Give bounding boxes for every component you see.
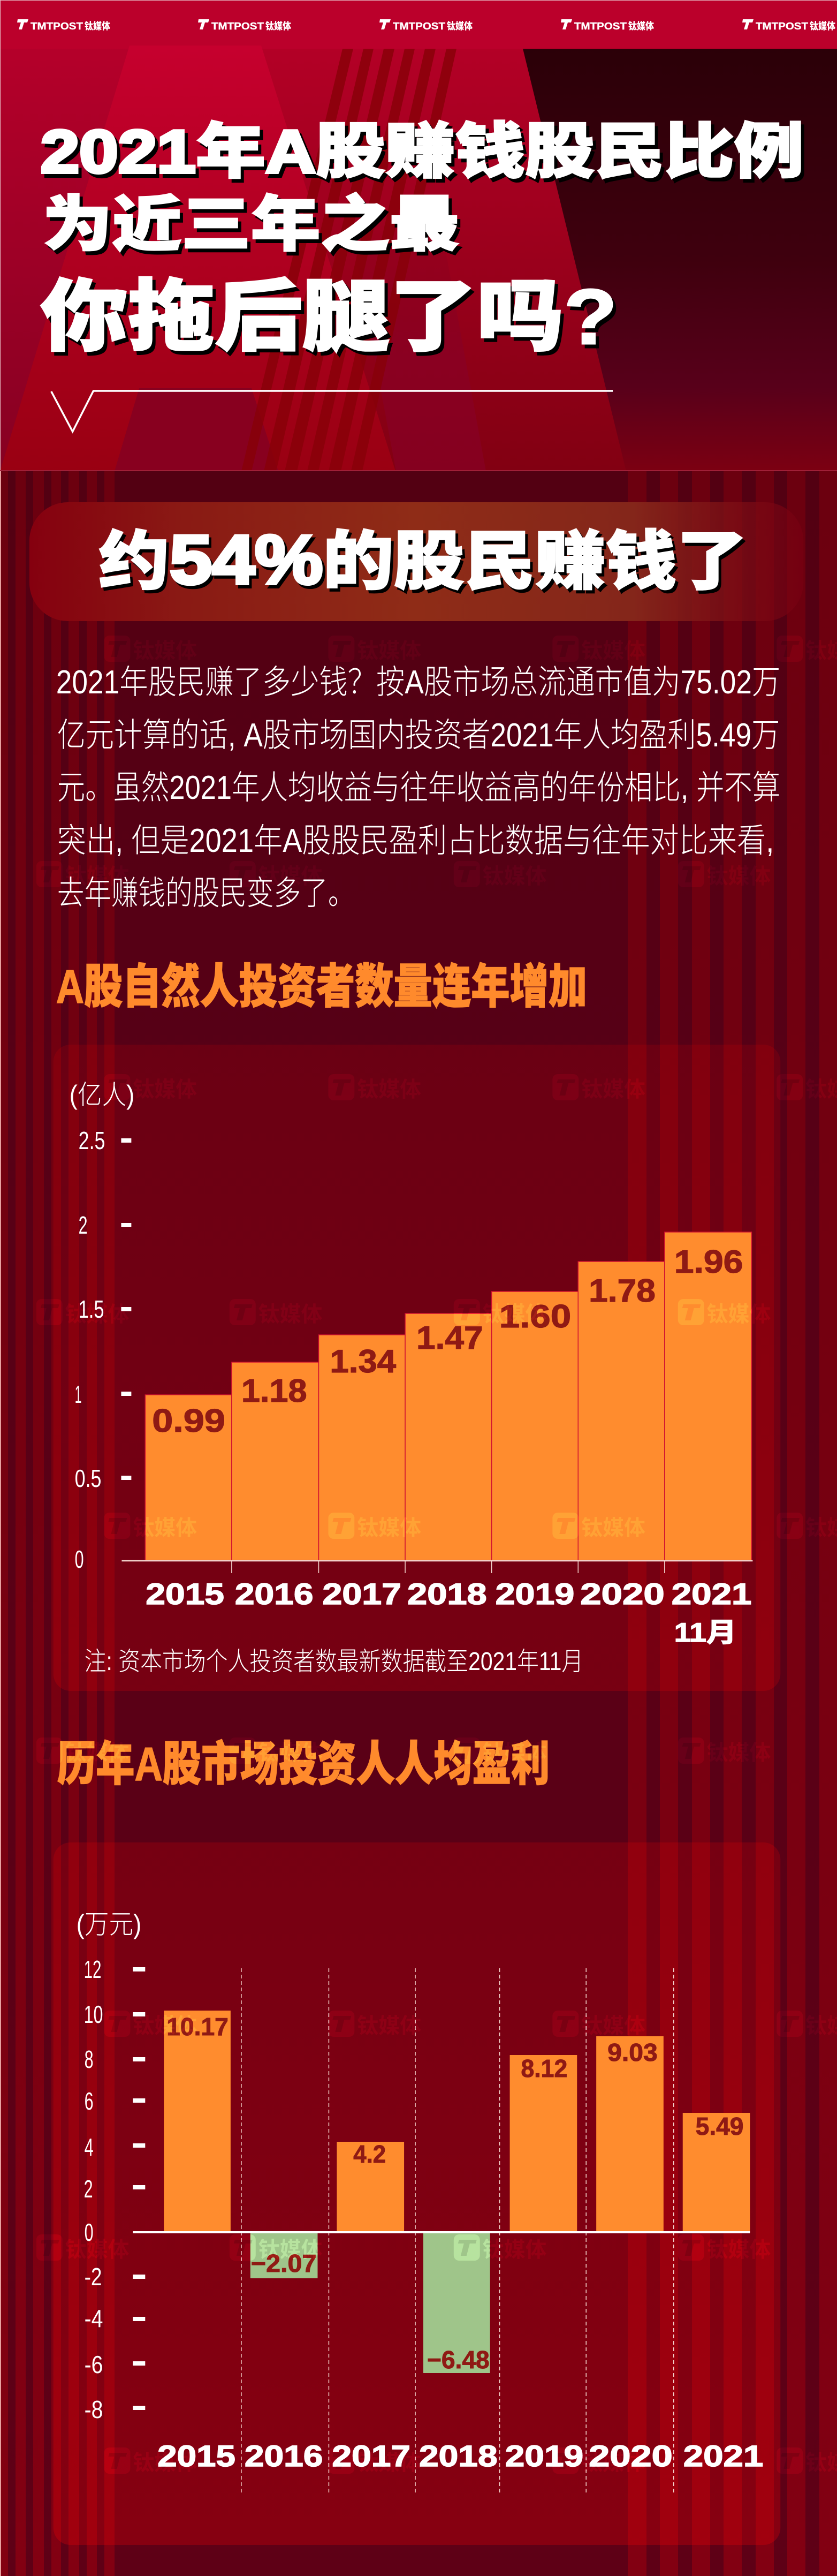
title: 2021 年A股赚钱股民比例 [41,118,804,185]
watermarks: 钛媒体 [357,1516,421,1540]
watermarks: 钛媒体 [357,2014,421,2038]
year labels: 2019 [496,1577,574,1611]
footnote: 注: 资本市场个人投资者数最新数据截至2021年11月 [85,1648,583,1676]
value labels: 1.47 [416,1320,483,1356]
y axis: 2.5 [79,1127,105,1154]
panel: chart 2 background [54,1842,780,2545]
bar chart: investor count [70,1080,752,1676]
watermarks: 钛媒体 [483,1303,546,1326]
value labels [166,2013,743,2374]
year labels: 2017 [322,1577,401,1611]
y axis: 0.5 [75,1464,102,1492]
paragraph: 去年赚钱的股民变多了。 [57,875,355,912]
y axis: -8 [85,2396,103,2423]
value labels: −2.07 [251,2249,316,2277]
watermarks: 钛媒体 [258,1741,323,1765]
year labels: 2018 [419,2439,498,2473]
y axis: -2 [85,2263,102,2291]
watermarks: 钛媒体 [707,865,771,888]
watermarks: 钛媒体 [581,639,645,663]
logo 4: 钛媒体 [628,21,654,32]
watermarks: 钛媒体 [357,1078,421,1101]
year labels [146,1577,751,1648]
value labels: 5.49 [696,2112,743,2140]
logo 5: TMTPOST [756,21,808,32]
value labels: 9.03 [607,2038,658,2066]
paragraph [56,664,780,912]
year labels: 2015 [146,1577,224,1611]
watermarks: 钛媒体 [707,2238,771,2262]
watermarks: 钛媒体 [483,2238,546,2262]
value labels: 4.2 [353,2140,386,2168]
y axis: 10 [84,2000,103,2028]
value labels: 1.34 [330,1343,396,1379]
y axis [84,1955,145,2423]
value labels: 8.12 [521,2054,567,2082]
unit label: (亿人) [70,1080,134,1110]
logo 2: TMTPOST [211,21,264,32]
logo 3: TMTPOST [393,21,445,32]
watermarks: 钛媒体 [581,2014,645,2038]
logo 2: 钛媒体 [265,21,291,32]
zero line [133,2231,750,2233]
y axis: 6 [85,2087,94,2115]
y axis: 8 [85,2045,94,2073]
positive bars [164,2011,750,2232]
value labels: 1.18 [241,1373,307,1409]
panel: chart 1 background [54,1045,780,1691]
year labels: 2015 [157,2439,235,2473]
watermarks: 钛媒体 [258,2238,323,2262]
title: 为近三年之最 [43,191,459,258]
unit label: (万元) [77,1909,141,1939]
y axis: -4 [85,2305,103,2332]
watermarks: 钛媒体 [133,1078,197,1101]
heading: investor count: A股自然人投资者数量连年增加 [56,960,587,1013]
y axis: -6 [85,2351,103,2378]
watermarks: 钛媒体 [483,865,546,888]
watermarks [36,636,837,2475]
logo 3: 钛媒体 [447,21,473,32]
year labels: 2020 [589,2439,673,2473]
header logos [17,19,835,32]
year labels: 2017 [332,2439,410,2473]
watermarks: 钛媒体 [65,1741,129,1765]
title check-mark line [51,391,613,432]
watermarks: 钛媒体 [357,639,421,663]
year labels [157,2439,763,2473]
y axis: 4 [85,2133,94,2161]
logo 1: TMTPOST [31,21,83,32]
logo 4: TMTPOST [574,21,627,32]
title [41,118,804,360]
watermarks: 钛媒体 [133,1516,197,1540]
y axis: 0 [85,2218,94,2246]
logo 2 [198,19,291,32]
watermarks: 钛媒体 [581,1516,645,1540]
y axis: 2 [84,2175,93,2203]
year labels: 2020 [580,1577,665,1611]
headline text: 约54%的股民赚钱了 [99,520,747,599]
value labels: 1.78 [589,1273,656,1309]
year labels: 2016 [235,1577,314,1611]
logo 1 [17,19,110,32]
watermarks: 钛媒体 [133,2451,197,2475]
watermarks: 钛媒体 [133,2014,197,2038]
value labels: −6.48 [427,2346,490,2374]
logo 5 [742,19,835,32]
value labels: 10.17 [166,2013,229,2041]
year labels: 2021 [672,1577,751,1611]
watermarks: 钛媒体 [581,2451,645,2475]
watermarks: 钛媒体 [133,639,197,663]
logo 4 [561,19,654,32]
x axis [121,1561,752,1573]
watermarks: 钛媒体 [258,1303,323,1326]
year labels: 2016 [245,2439,323,2473]
watermarks: 钛媒体 [258,865,323,888]
negative bars [250,2232,490,2373]
y axis: 1 [75,1380,82,1408]
logo 1: 钛媒体 [85,21,110,32]
header background with stage light shapes [0,0,837,471]
value labels: 1.60 [499,1298,571,1334]
y axis: 12 [84,1955,102,1983]
logo 3 [379,19,473,32]
watermarks: 钛媒体 [581,1078,645,1101]
watermarks: 钛媒体 [65,1303,129,1326]
bars [145,1232,751,1560]
y axis: 0 [75,1545,84,1573]
bar chart: profit per investor [77,1909,763,2492]
value labels: 0.99 [152,1403,225,1439]
dashed grid [241,1968,674,2492]
watermarks: 钛媒体 [65,865,129,888]
year labels: 2018 [407,1577,487,1611]
y axis: 2 [79,1211,88,1239]
watermarks: 钛媒体 [65,2238,129,2262]
title: 你拖后腿了吗? [41,273,617,360]
watermarks: 钛媒体 [483,1741,546,1765]
headline pill [29,502,803,621]
value labels: 1.96 [674,1244,743,1280]
watermarks: 钛媒体 [707,1741,771,1765]
watermarks: 钛媒体 [357,2451,421,2475]
year labels: 11月 [674,1618,736,1648]
y axis [75,1127,131,1573]
y axis: 1.5 [79,1295,104,1323]
heading: profit per investor: 历年A股市场投资人人均盈利 [57,1738,550,1791]
value labels [152,1244,743,1439]
watermarks: 钛媒体 [707,1303,771,1326]
year labels: 2019 [505,2439,583,2473]
year labels: 2021 [683,2439,763,2473]
